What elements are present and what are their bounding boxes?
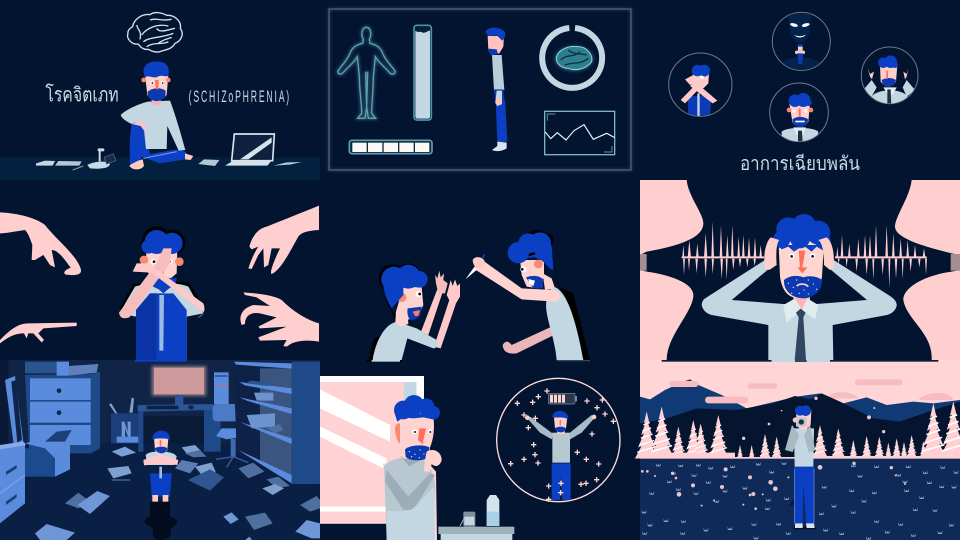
wall and floor — [0, 360, 320, 540]
icon: body outline — [338, 27, 395, 118]
leaning mirror — [5, 376, 23, 447]
floor band — [0, 157, 320, 180]
bin with rolled paper — [109, 398, 139, 443]
icon: hand bottom left — [0, 323, 77, 343]
vignette: character hands raised — [861, 47, 918, 107]
panel: knife attack — [368, 230, 590, 360]
table with jar and bottle — [438, 495, 514, 540]
vignette: mask and small figure — [772, 12, 830, 72]
character profile — [485, 28, 507, 151]
icon: left listening face — [640, 180, 703, 360]
sky — [640, 360, 960, 460]
desk and computer — [138, 366, 229, 452]
panel: snowy landscape — [635, 360, 960, 540]
top bleed strips — [367, 360, 590, 362]
scattered papers — [35, 445, 320, 540]
panel: acute symptoms — [669, 12, 918, 175]
panel: messy room — [0, 360, 320, 540]
Thai heading: โรคจิตเภท — [45, 84, 119, 107]
panel: voices — [640, 180, 960, 360]
far mountains — [640, 379, 960, 460]
bookshelf — [233, 362, 320, 484]
snowy field — [640, 459, 960, 540]
ring with brain — [542, 28, 602, 88]
icon: hand top left — [0, 212, 81, 275]
drawer unit — [25, 362, 100, 453]
icon: right listening face — [895, 180, 960, 360]
panel: pointing hands — [0, 206, 319, 360]
filing cabinet — [0, 442, 26, 523]
character attacking — [465, 230, 590, 360]
near mountains — [640, 393, 960, 460]
sound wave right — [835, 225, 927, 288]
character drinking — [383, 395, 442, 540]
sparkles — [508, 388, 616, 502]
vignette: smiling character — [770, 83, 828, 143]
window — [320, 376, 424, 524]
character sitting — [121, 62, 193, 169]
top bleed — [662, 360, 938, 362]
grass tufts — [641, 461, 959, 540]
icon: brain outline — [128, 13, 182, 52]
floor debris left — [36, 148, 116, 170]
panel: title schizophrenia — [0, 13, 320, 180]
vertical level meter — [414, 25, 431, 120]
English heading: (SCHIZoPHRENIA) — [189, 87, 289, 106]
icon: hand bottom right — [240, 292, 319, 347]
line chart — [545, 111, 615, 155]
frame — [329, 9, 631, 170]
character covering ears — [702, 214, 897, 360]
character blocking — [119, 226, 204, 360]
character defending — [368, 263, 460, 360]
clouds — [669, 379, 953, 403]
horizontal progress bar — [349, 140, 432, 154]
icon: hand top right — [248, 206, 319, 274]
vignette: energised character — [497, 378, 620, 502]
laptop and papers — [198, 134, 302, 166]
Thai caption: อาการเฉียบพลัน — [740, 153, 860, 175]
vignette: character crossing arms — [669, 53, 732, 118]
character sitting on floor — [143, 431, 178, 540]
character with camera — [785, 405, 817, 529]
panel: body scan monitor — [329, 9, 631, 170]
office chair — [213, 404, 252, 467]
tree line — [635, 401, 960, 459]
panel: taking medicine — [320, 360, 620, 540]
sound wave left — [682, 222, 764, 280]
falling snow — [641, 397, 906, 510]
cardboard box — [25, 430, 72, 477]
